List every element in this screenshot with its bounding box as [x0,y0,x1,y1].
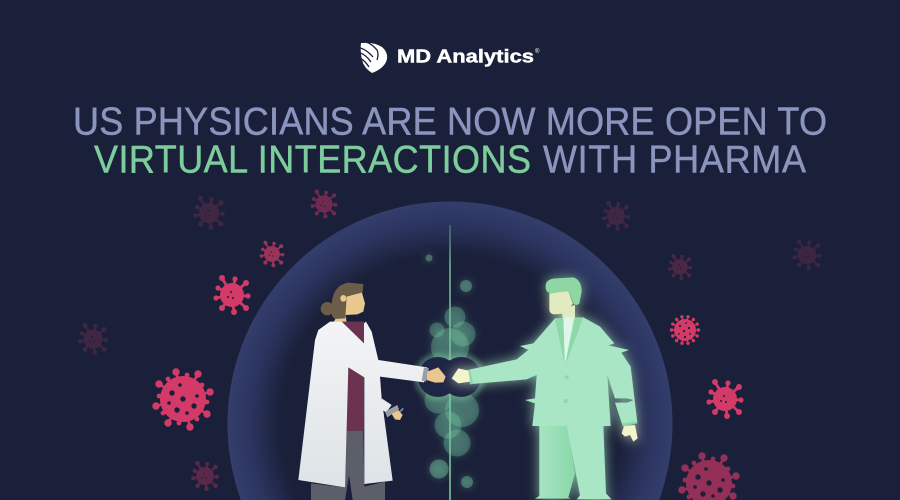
lower arm cuff [622,421,637,426]
virus: large left [152,368,214,431]
virus: dim far left [78,323,108,355]
hair [546,277,582,305]
portal ring [414,353,485,401]
shirt [342,322,364,431]
doctor figure [298,283,446,500]
logo wordmark: MD Analytics [397,46,534,66]
jacket [468,317,637,426]
title line 2 end: WITH PHARMA [543,137,806,181]
lower cuff [385,405,399,417]
virus: dim bottom left [191,461,219,491]
virus: many spikes right [670,315,700,345]
icon: shield mark [360,42,387,73]
pants [311,431,385,500]
businessman hologram [452,277,638,499]
title highlight: VIRTUAL INTERACTIONS [94,137,531,181]
portal interior [418,357,481,397]
pen [400,408,403,412]
logo: MD Analytics [360,42,540,73]
lab coat [298,322,427,487]
viruses [78,190,822,500]
doctor hand [427,367,446,383]
lower hand [622,425,638,442]
right leg [567,425,612,499]
face [549,291,573,314]
sleeve lower [382,398,392,413]
title line 1: US PHYSICIANS ARE NOW MORE OPEN TO [73,99,827,143]
lapels [555,317,583,366]
virus: small right [668,254,692,280]
virus: large bottom right, cut by the page edge [678,452,740,500]
neck [562,305,575,318]
neck and face [333,292,365,323]
virus: medium right [706,379,744,419]
hair bun [321,302,334,315]
virus: medium left [213,275,251,315]
buttons [564,375,569,403]
divider line [449,225,451,500]
virus: small left upper [260,241,284,267]
hair [332,283,363,319]
protective sphere [228,201,672,500]
bokeh particles [424,254,479,488]
virus: dim far right [792,239,822,271]
arm cuff [422,367,429,382]
left leg [535,425,575,499]
hand [452,368,470,383]
title [73,99,827,181]
virus: dim top right [602,201,630,231]
registered mark: ® [535,48,540,55]
lower hand [392,410,403,420]
ear [340,295,346,302]
shirt [563,317,574,365]
virus: dim top left [193,196,225,230]
handshake portal [414,353,485,401]
virus: top centre left [311,190,337,218]
cuff [468,370,473,384]
